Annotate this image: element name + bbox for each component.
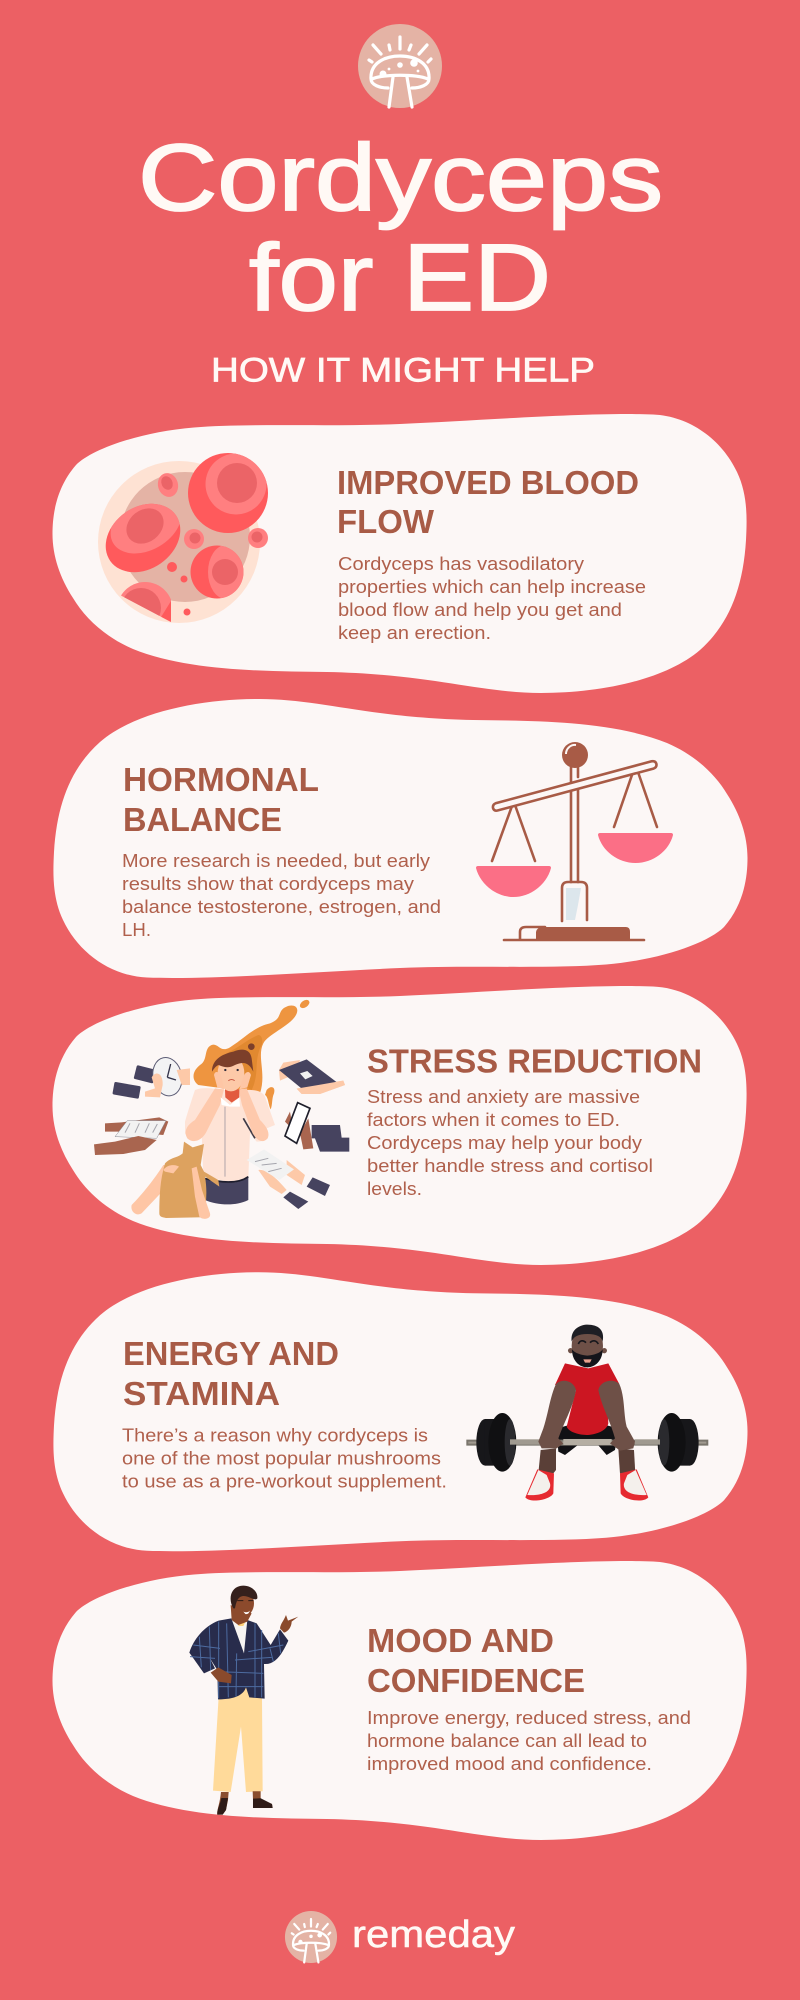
heading	[123, 761, 319, 838]
heading	[367, 1622, 585, 1699]
body text: to use as a pre-workout supplement.	[122, 1470, 447, 1492]
body text: keep an erection.	[338, 622, 491, 643]
panel: mood and confidence	[52, 1561, 747, 1840]
body text: levels.	[367, 1178, 422, 1199]
body text	[367, 1707, 691, 1774]
illustration: stressed person	[94, 998, 349, 1219]
heading	[337, 464, 639, 540]
body text	[367, 1086, 653, 1199]
brand name: remeday	[352, 1914, 515, 1956]
heading: ENERGY AND	[123, 1335, 339, 1372]
body text: better handle stress and cortisol	[367, 1155, 653, 1176]
icon: balance scale	[476, 742, 673, 940]
body text: one of the most popular mushrooms	[122, 1448, 441, 1468]
body text: properties which can help increase	[338, 576, 646, 597]
panel: energy and stamina	[53, 1272, 748, 1551]
heading: HORMONAL	[123, 761, 319, 798]
subtitle: HOW IT MIGHT HELP	[211, 352, 595, 390]
body text	[338, 553, 646, 643]
body text: Cordyceps may help your body	[367, 1132, 643, 1153]
body text: hormone balance can all lead to	[367, 1730, 647, 1751]
body text	[122, 1424, 447, 1492]
icon: blood cells	[98, 453, 268, 623]
heading: CONFIDENCE	[367, 1662, 585, 1699]
body text: More research is needed, but early	[122, 850, 431, 871]
panel: hormonal balance	[53, 699, 748, 978]
title: Cordyceps	[138, 125, 663, 231]
body text: LH.	[122, 919, 151, 940]
body text: results show that cordyceps may	[122, 873, 415, 894]
illustration: weightlifter	[467, 1325, 707, 1500]
body text: There’s a reason why cordyceps is	[122, 1424, 428, 1446]
title: for ED	[249, 225, 551, 331]
title	[138, 125, 663, 331]
heading: BALANCE	[123, 801, 282, 838]
footer logo	[285, 1911, 515, 1963]
illustration: confident man	[189, 1586, 298, 1815]
heading: FLOW	[337, 503, 435, 540]
panel: stress reduction	[52, 986, 747, 1265]
body text: balance testosterone, estrogen, and	[122, 896, 441, 917]
logo: top mushroom badge	[358, 24, 442, 108]
body text: blood flow and help you get and	[338, 599, 622, 620]
panel: improved blood flow	[52, 414, 747, 693]
body text	[122, 850, 441, 940]
body text: improved mood and confidence.	[367, 1753, 652, 1774]
heading: IMPROVED BLOOD	[337, 464, 639, 501]
icon: mushroom badge	[285, 1911, 337, 1963]
heading: MOOD AND	[367, 1622, 554, 1659]
body text: Stress and anxiety are massive	[367, 1086, 640, 1107]
heading: STAMINA	[123, 1375, 280, 1412]
body text: Improve energy, reduced stress, and	[367, 1707, 691, 1728]
body text: factors when it comes to ED.	[367, 1109, 620, 1130]
body text: Cordyceps has vasodilatory	[338, 553, 585, 574]
heading: STRESS REDUCTION	[367, 1042, 702, 1080]
heading	[123, 1335, 339, 1412]
